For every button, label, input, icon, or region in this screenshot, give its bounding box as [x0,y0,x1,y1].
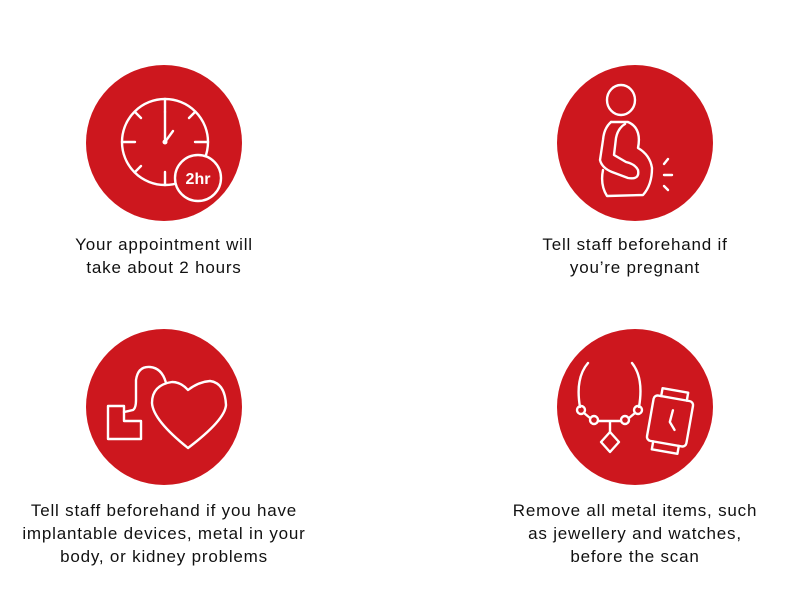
icon: clock: 2hr [186,171,210,188]
icon: heart and implant [86,329,242,485]
icon: clock [86,65,242,221]
text: implants: implantable devices, metal in your [22,524,306,543]
text: metal items [513,501,757,566]
text: metal items: Remove all metal items, such [513,501,757,520]
icon: pregnant person [557,65,713,221]
text: metal items: before the scan [570,547,700,566]
text: appointment [75,235,253,277]
text: implants: body, or kidney problems [60,547,268,566]
icon: jewellery and watch [557,329,713,485]
text: pregnant: Tell staff beforehand if [542,235,728,254]
text: appointment: Your appointment will [75,235,253,254]
text: implants [22,501,306,566]
text: pregnant: you’re pregnant [570,258,700,277]
text: pregnant [542,235,728,277]
text: metal items: as jewellery and watches, [528,524,742,543]
text: appointment: take about 2 hours [86,258,242,277]
text: implants: Tell staff beforehand if you have [31,501,297,520]
